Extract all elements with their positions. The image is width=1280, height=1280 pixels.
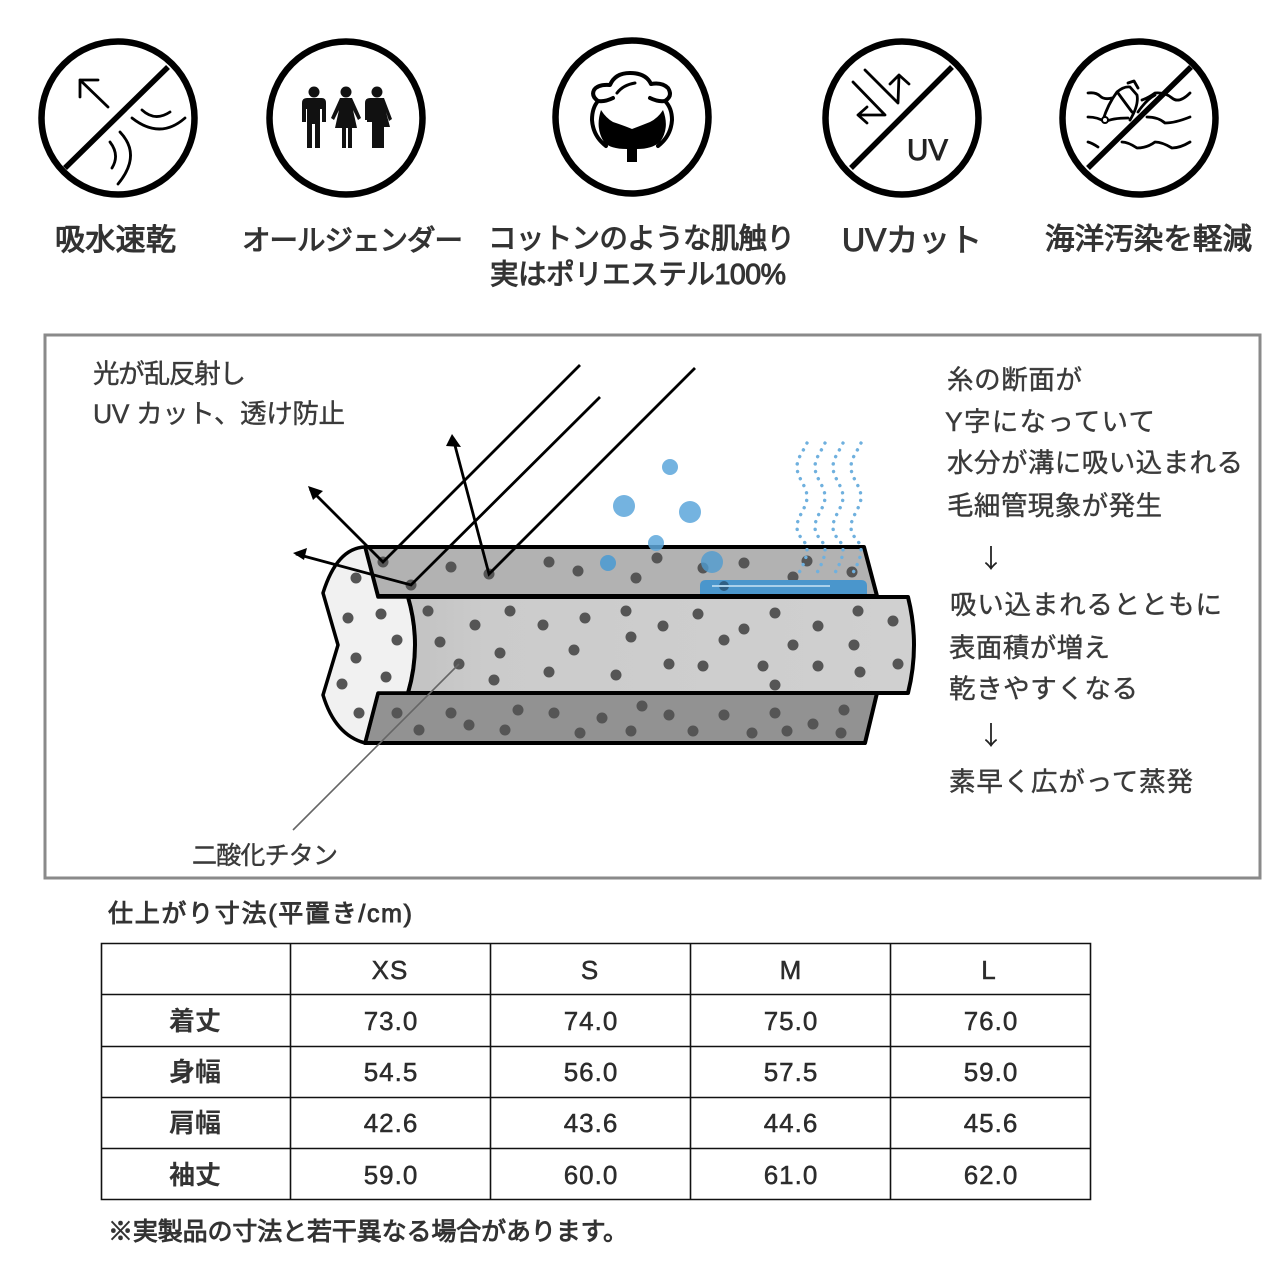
evaporation dotted waves — [797, 443, 861, 577]
heading: cotton-like polyester: コットンのような肌触り — [488, 223, 795, 255]
row: body width: 54.5 — [364, 1057, 418, 1087]
heading: reduces ocean pollution: 海洋汚染を軽減 — [1045, 223, 1252, 256]
icon: cotton boll — [556, 40, 708, 194]
row: length: 74.0 — [564, 1006, 618, 1036]
water film and droplets — [600, 459, 867, 594]
icon: all-gender people — [270, 42, 422, 194]
fibre end cap — [323, 547, 415, 743]
row: shoulder width: 42.6 — [364, 1108, 418, 1138]
table header row: L — [981, 955, 997, 985]
row: length: 75.0 — [764, 1006, 818, 1036]
row: shoulder width: 43.6 — [564, 1108, 618, 1138]
table header row — [372, 955, 997, 985]
table header row: XS — [372, 955, 408, 985]
text: light scatter note: UV カット、透け防止 — [93, 399, 345, 429]
heading: cotton-like polyester: 実はポリエステル100% — [490, 259, 786, 291]
text: capillary explanation: 素早く広がって蒸発 — [949, 767, 1193, 797]
arrowheads — [293, 434, 461, 560]
row: body width: 57.5 — [764, 1057, 818, 1087]
row: length: 76.0 — [964, 1006, 1018, 1036]
text: capillary explanation: ↓ — [978, 539, 1004, 576]
text: capillary explanation: 水分が溝に吸い込まれる — [947, 448, 1243, 478]
text: light scatter note — [93, 359, 345, 429]
row: body width — [169, 1057, 1018, 1087]
row: shoulder width: 44.6 — [764, 1108, 818, 1138]
diagram: Y-shaped fibre — [293, 365, 914, 830]
fibre core — [408, 597, 914, 693]
text: capillary explanation: 吸い込まれるとともに — [950, 590, 1222, 620]
text: capillary explanation: 糸の断面が — [947, 365, 1082, 395]
heading: UV cut: UVカット — [842, 222, 982, 258]
icon: ocean pollution — [1062, 42, 1216, 194]
text: capillary explanation — [945, 365, 1243, 797]
row: sleeve length: 59.0 — [364, 1160, 418, 1190]
row: sleeve length — [169, 1160, 1018, 1190]
row: sleeve length: 61.0 — [764, 1160, 818, 1190]
table header row: S — [581, 955, 599, 985]
row: body width: 56.0 — [564, 1057, 618, 1087]
row: sleeve length: 袖丈 — [169, 1160, 221, 1190]
text: capillary explanation: ↓ — [978, 716, 1004, 753]
row: length: 着丈 — [169, 1006, 221, 1036]
row: sleeve length: 60.0 — [564, 1160, 618, 1190]
label: titanium dioxide: 二酸化チタン — [192, 842, 338, 870]
icon: quick-dry — [42, 42, 194, 194]
footnote: ※実製品の寸法と若干異なる場合があります。 — [108, 1218, 628, 1246]
fibre lower band — [365, 693, 877, 743]
table title: 仕上がり寸法(平置き/cm) — [108, 900, 412, 928]
text: capillary explanation: 毛細管現象が発生 — [947, 491, 1162, 521]
light rays and reflections — [296, 365, 695, 585]
row: body width: 59.0 — [964, 1057, 1018, 1087]
titanium dioxide dots — [336, 552, 904, 738]
row: shoulder width — [169, 1108, 1018, 1138]
heading: cotton-like polyester — [488, 223, 795, 291]
panel: fibre cross-section diagram — [45, 335, 1260, 878]
size table — [102, 944, 1090, 1200]
heading: all gender: オールジェンダー — [242, 225, 463, 257]
text: light scatter note: 光が乱反射し — [93, 359, 246, 389]
leader line: titanium dioxide — [293, 664, 459, 830]
heading: quick dry: 吸水速乾 — [55, 224, 176, 257]
table header row: M — [780, 955, 802, 985]
text: capillary explanation: Y字になっていて — [945, 407, 1155, 437]
fibre top band — [365, 547, 877, 596]
label: UV in icon: UV — [907, 134, 948, 167]
row: length: 73.0 — [364, 1006, 418, 1036]
text: capillary explanation: 表面積が増え — [949, 633, 1110, 663]
row: sleeve length: 62.0 — [964, 1160, 1018, 1190]
row: shoulder width: 肩幅 — [169, 1108, 221, 1138]
icon: UV cut — [826, 42, 978, 194]
text: capillary explanation: 乾きやすくなる — [949, 674, 1138, 704]
row: body width: 身幅 — [169, 1057, 221, 1087]
row: length — [169, 1006, 1018, 1036]
row: shoulder width: 45.6 — [964, 1108, 1018, 1138]
